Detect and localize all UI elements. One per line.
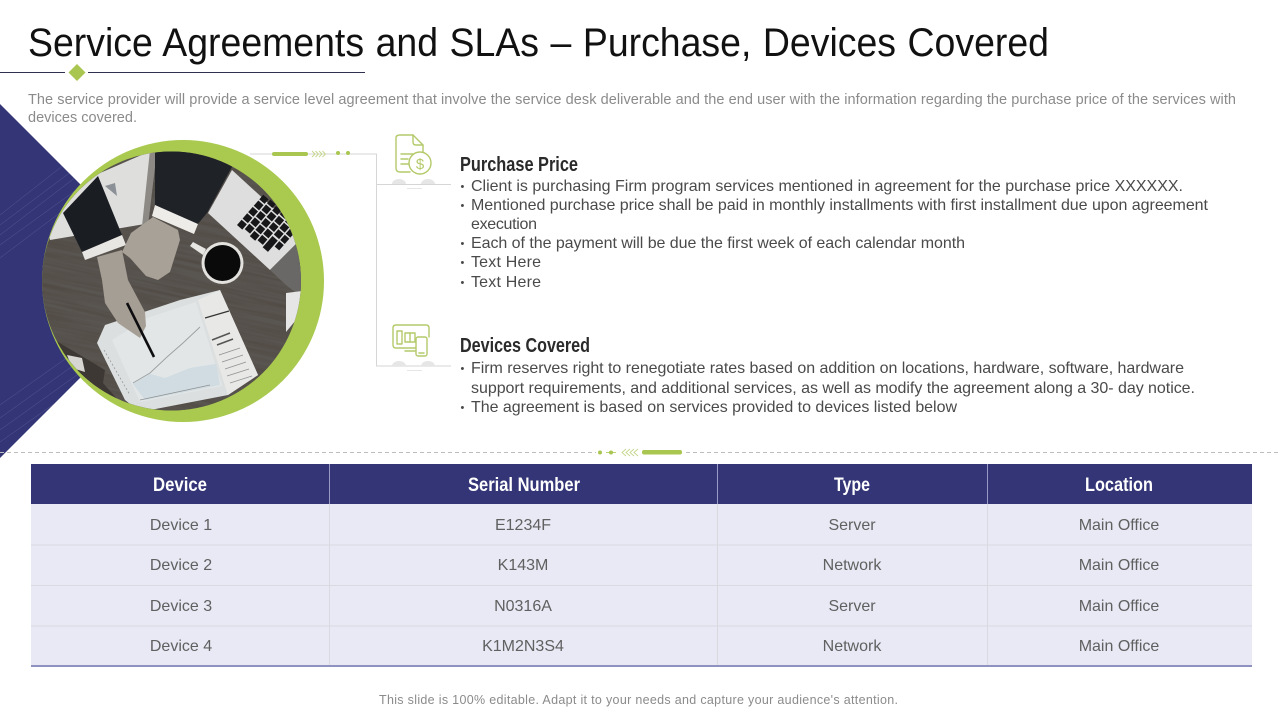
row: device 4: K1M2N3S4 xyxy=(482,638,564,655)
purchase price bullets xyxy=(460,178,1209,291)
dashed divider xyxy=(0,446,1280,459)
photo: right hand xyxy=(122,217,180,280)
photo: keyboard xyxy=(237,194,292,252)
row: device 1 xyxy=(150,517,1159,534)
row: device 1: E1234F xyxy=(495,517,551,534)
photo: business desk xyxy=(42,152,301,410)
photo: white sheet right xyxy=(286,291,302,332)
row: device 1: Device 1 xyxy=(150,517,212,534)
photo: paper top left xyxy=(44,150,153,240)
row: device 3: N0316A xyxy=(494,598,552,615)
heading: purchase price: Purchase Price xyxy=(460,154,578,176)
devices covered bullets: Firm reserves right to renegotiate rates based on addition on locations, hardware, software, hardware xyxy=(471,360,1184,377)
photo: left sleeve xyxy=(63,176,122,252)
icon base: devices covered xyxy=(392,361,435,371)
purchase price bullets: • xyxy=(460,200,464,212)
photo: right cuff xyxy=(152,205,198,234)
photo: laptop xyxy=(208,170,304,270)
navy triangle xyxy=(0,104,80,458)
connector lines xyxy=(250,154,451,366)
row: device 1: Main Office xyxy=(1079,517,1159,534)
purchase price bullets: Client is purchasing Firm program services mentioned in agreement for the purchase price XXXXXX. xyxy=(471,178,1183,195)
table header xyxy=(31,464,1252,504)
photo: newspaper text xyxy=(104,311,252,400)
row: device 2: Main Office xyxy=(1079,557,1159,574)
text block: devices covered xyxy=(460,335,1195,416)
icon: invoice with dollar xyxy=(396,135,431,174)
row: device 2: Device 2 xyxy=(150,557,212,574)
title: Service Agreements and SLAs – Purchase, Devices Covered xyxy=(28,21,1049,65)
row: device 4 xyxy=(150,638,1159,655)
table header: Type xyxy=(834,475,870,496)
intro text: The service provider will provide a service level agreement that involve the service desk deliverable and the end user with the information regarding the purchase price of the services with xyxy=(28,92,1236,108)
text block: purchase price xyxy=(460,154,1209,291)
table header: Serial Number xyxy=(468,475,581,496)
row: device 2: K143M xyxy=(498,557,548,574)
photo: left hand xyxy=(97,250,146,338)
table body background xyxy=(31,504,1252,667)
row: device 2 xyxy=(150,557,1159,574)
devices covered bullets: • xyxy=(460,363,464,375)
row: device 3 xyxy=(150,598,1159,615)
photo: chart line xyxy=(133,327,200,383)
purchase price bullets: • xyxy=(460,238,464,250)
devices covered bullets: • xyxy=(460,402,464,414)
photo: left cuff xyxy=(82,235,126,260)
icon base: purchase price xyxy=(392,179,435,189)
green ring xyxy=(42,140,324,422)
purchase price bullets: Each of the payment will be due the first week of each calendar month xyxy=(471,235,965,252)
heading: devices covered: Devices Covered xyxy=(460,335,590,357)
photo: right sleeve xyxy=(155,152,232,224)
devices covered bullets: support requirements, and additional services, as well as modify the agreement along a 30- day notice. xyxy=(471,380,1195,397)
title rule with diamond xyxy=(0,64,365,81)
decorative connector accent top xyxy=(272,151,350,157)
table header: Location xyxy=(1085,475,1153,496)
intro text xyxy=(28,92,1236,126)
row: device 3: Device 3 xyxy=(150,598,212,615)
purchase price bullets: Text Here xyxy=(471,254,541,271)
footer note: This slide is 100% editable. Adapt it to your needs and capture your audience's attention. xyxy=(379,693,898,707)
row: device 3: Main Office xyxy=(1079,598,1159,615)
table xyxy=(31,464,1252,667)
intro text: devices covered. xyxy=(28,110,137,126)
row: device 4: Main Office xyxy=(1079,638,1159,655)
photo: pen xyxy=(127,303,154,357)
purchase price bullets: • xyxy=(460,181,464,193)
devices covered bullets xyxy=(460,360,1195,416)
table header: Device xyxy=(153,475,207,496)
icon: invoice with dollar: $ xyxy=(416,156,425,173)
icon: monitor and phone xyxy=(393,325,429,356)
photo: coffee cup xyxy=(190,242,244,284)
row: device 2: Network xyxy=(823,557,882,574)
row: device 4: Device 4 xyxy=(150,638,212,655)
row: device 1: Server xyxy=(828,517,876,534)
photo: lower-left dark corner xyxy=(58,342,116,398)
purchase price bullets: • xyxy=(460,277,464,289)
purchase price bullets: execution xyxy=(471,216,537,233)
purchase price bullets: • xyxy=(460,257,464,269)
purchase price bullets: Text Here xyxy=(471,274,541,291)
purchase price bullets: Mentioned purchase price shall be paid in monthly installments with first installment due upon agreement xyxy=(471,197,1209,214)
row: device 3: Server xyxy=(828,598,876,615)
row: device 4: Network xyxy=(823,638,882,655)
devices covered bullets: The agreement is based on services provided to devices listed below xyxy=(471,399,957,416)
photo: newspaper xyxy=(97,290,258,412)
